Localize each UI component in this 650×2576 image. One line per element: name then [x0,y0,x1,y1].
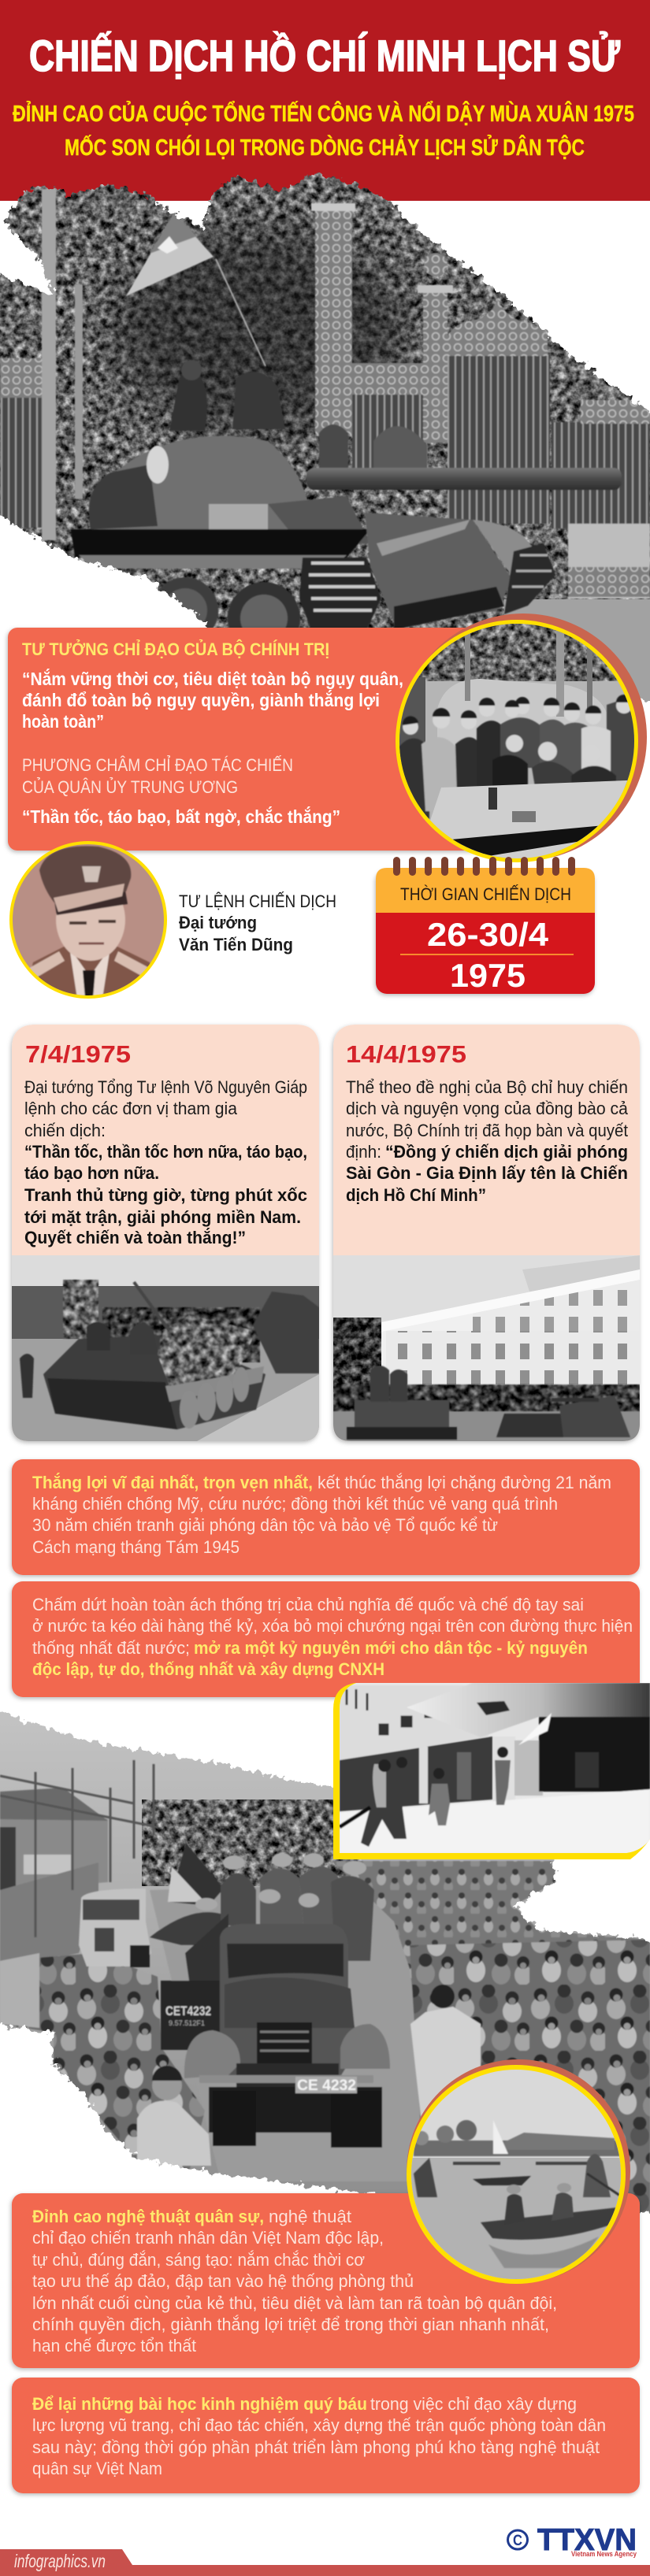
card text: Thể theo đề nghị của Bộ chỉ huy chiến [346,1077,628,1097]
card text: nước, Bộ Chính trị đã họp bàn và quyết [346,1121,628,1140]
card text: định: [346,1142,381,1162]
panel: peak of military art [12,2193,640,2368]
calendar: campaign dates: THỜI GIAN CHIẾN DỊCH [400,884,571,904]
panel: new era: độc lập, tự do, thống nhất và xây dựng CNXH [32,1659,384,1679]
quote: directive: hoàn toàn” [22,711,104,732]
commander portrait [8,840,169,1000]
date heading: 14/4/1975 [346,1040,466,1068]
panel: greatest victory: kháng chiến chống Mỹ, cứu nước; đồng thời kết thúc vẻ vang quá trình [32,1494,558,1514]
panel: greatest victory [12,1459,640,1575]
card text: Quyết chiến và toàn thắng!” [24,1228,246,1247]
commander caption: Đại tướng [179,913,257,932]
quote: guideline: “Thần tốc, táo bạo, bất ngờ, chắc thắng” [22,806,340,827]
card text: dịch và nguyện vọng của đồng bào cả [346,1099,629,1118]
panel: peak of military art: Đỉnh cao nghệ thuật quân sự, [32,2207,264,2226]
photo: Independence Palace [333,1255,640,1441]
photo: armoured vehicle [12,1255,319,1441]
panel: peak of military art: chính quyền địch, giành thắng lợi triệt để trong thời gian nhanh nhất, [32,2315,549,2334]
card text: lệnh cho các đơn vị tham gia [24,1099,238,1118]
quote: directive: “Nắm vững thời cơ, tiêu diệt toàn bộ ngụy quân, [22,668,403,689]
photo circle: politburo meeting [394,613,647,866]
foreground men [410,2007,481,2122]
panel: new era: ở nước ta kéo dài hàng thế kỷ, xóa bỏ mọi chướng ngại trên con đường thực hiện [32,1616,633,1636]
photo: truck welcomed by crowd [0,1701,650,2221]
commander caption: Văn Tiến Dũng [179,935,293,954]
subheading: guideline: CỦA QUÂN ỦY TRUNG ƯƠNG [22,777,238,797]
card: 7/4/1975 [12,1025,319,1441]
header banner [0,0,650,201]
photo circle: river boats [406,2059,630,2292]
panel: peak of military art: hạn chế được tổn thất [32,2336,196,2355]
card text: “Thần tốc, thần tốc hơn nữa, táo bạo, [24,1142,307,1162]
calendar: campaign dates [376,857,595,994]
card text: tới mặt trận, giải phóng miền Nam. [24,1207,301,1227]
panel: new era: thống nhất đất nước; [32,1638,190,1658]
panel: politburo directive [8,628,496,851]
quote: directive [22,668,403,732]
card text: chiến dịch: [24,1121,106,1140]
panel: peak of military art: lớn nhất cuối cùng của kẻ thù, tiêu diệt và làm tan rã toàn bộ quân đội, [32,2293,557,2313]
commander caption: TƯ LỆNH CHIẾN DỊCH [179,891,336,911]
photo: tank at the palace gate [0,165,650,709]
panel: peak of military art: chỉ đạo chiến tranh nhân dân Việt Nam độc lập, [32,2228,384,2248]
card text: táo bạo hơn nữa. [24,1163,159,1183]
date heading: 7/4/1975 [25,1040,131,1068]
card text: dịch Hồ Chí Minh” [346,1185,486,1205]
panel: greatest victory: 30 năm chiến tranh giải phóng dân tộc và bảo vệ Tổ quốc kể từ [32,1515,498,1535]
subheading: guideline [22,755,293,797]
logo: TTXVN: Vietnam News Agency [571,2550,637,2558]
panel: greatest victory: Thắng lợi vĩ đại nhất, trọn vẹn nhất, [32,1473,313,1492]
quote: directive: đánh đổ toàn bộ ngụy quyền, giành thắng lợi [22,689,380,710]
panel: peak of military art: nghệ thuật [269,2207,351,2226]
card text [346,1077,629,1205]
logo: TTXVN: TTXVN [537,2523,637,2557]
photo: truck welcomed by crowd: CE 4232 [297,2077,356,2094]
flag on truck [169,1843,224,1906]
panel: peak of military art: tạo ưu thế áp đảo, đập tan vào hệ thống phòng thủ [32,2271,414,2291]
panel: valuable lessons: quân sự Việt Nam [32,2459,162,2478]
photo: truck welcomed by crowd: 9.57.512F1 [169,2019,205,2027]
photo: storming the palace [333,1683,650,1859]
flag [126,213,266,366]
panel: valuable lessons: Để lại những bài học kinh nghiệm quý báu [32,2394,367,2414]
calendar: campaign dates: 26-30/4 [427,916,549,953]
footer band [0,2549,650,2576]
card text: “Đồng ý chiến dịch giải phóng [385,1142,628,1162]
subheading: guideline: PHƯƠNG CHÂM CHỈ ĐẠO TÁC CHIẾN [22,755,293,775]
tank [71,360,622,654]
jeep [79,1888,151,1966]
logo: TTXVN: C [513,2533,522,2549]
panel: new era [12,1581,640,1697]
panel: valuable lessons: trong việc chỉ đạo xây dựng [370,2394,577,2414]
card: 14/4/1975 [333,1025,640,1441]
truck [209,2087,382,2133]
photo: truck welcomed by crowd: CET4232 [165,2003,211,2018]
calendar: campaign dates: 1975 [450,957,526,994]
footer band: infographics.vn [14,2551,106,2571]
card text: Đại tướng Tổng Tư lệnh Võ Nguyên Giáp [24,1077,307,1097]
card text [24,1077,307,1247]
panel: valuable lessons [12,2378,640,2493]
panel: peak of military art: tự chủ, đúng đắn, sáng tạo: nắm chắc thời cơ [32,2250,365,2270]
panel: greatest victory: kết thúc thắng lợi chặng đường 21 năm [318,1473,611,1492]
panel: valuable lessons: lực lượng vũ trang, chỉ đạo tác chiến, xây dựng thế trận quốc phòng toàn dân [32,2415,606,2435]
card text: Sài Gòn - Gia Định lấy tên là Chiến [346,1163,628,1183]
panel: greatest victory: Cách mạng tháng Tám 1945 [32,1537,240,1557]
panel: new era: mở ra một kỷ nguyên mới cho dân tộc - kỷ nguyên [194,1638,588,1658]
panel: new era: Chấm dứt hoàn toàn ách thống trị của chủ nghĩa đế quốc và chế độ tay sai [32,1595,584,1614]
soldiers [221,1874,256,1926]
card text: Tranh thủ từng giờ, từng phút xốc [24,1185,307,1205]
heading: directive: TƯ TƯỞNG CHỈ ĐẠO CỦA BỘ CHÍNH TRỊ [22,639,329,659]
panel: valuable lessons: sau này; đồng thời góp phần phát triển làm phong phú kho tàng nghệ thuật [32,2437,600,2457]
commander caption [179,891,336,954]
